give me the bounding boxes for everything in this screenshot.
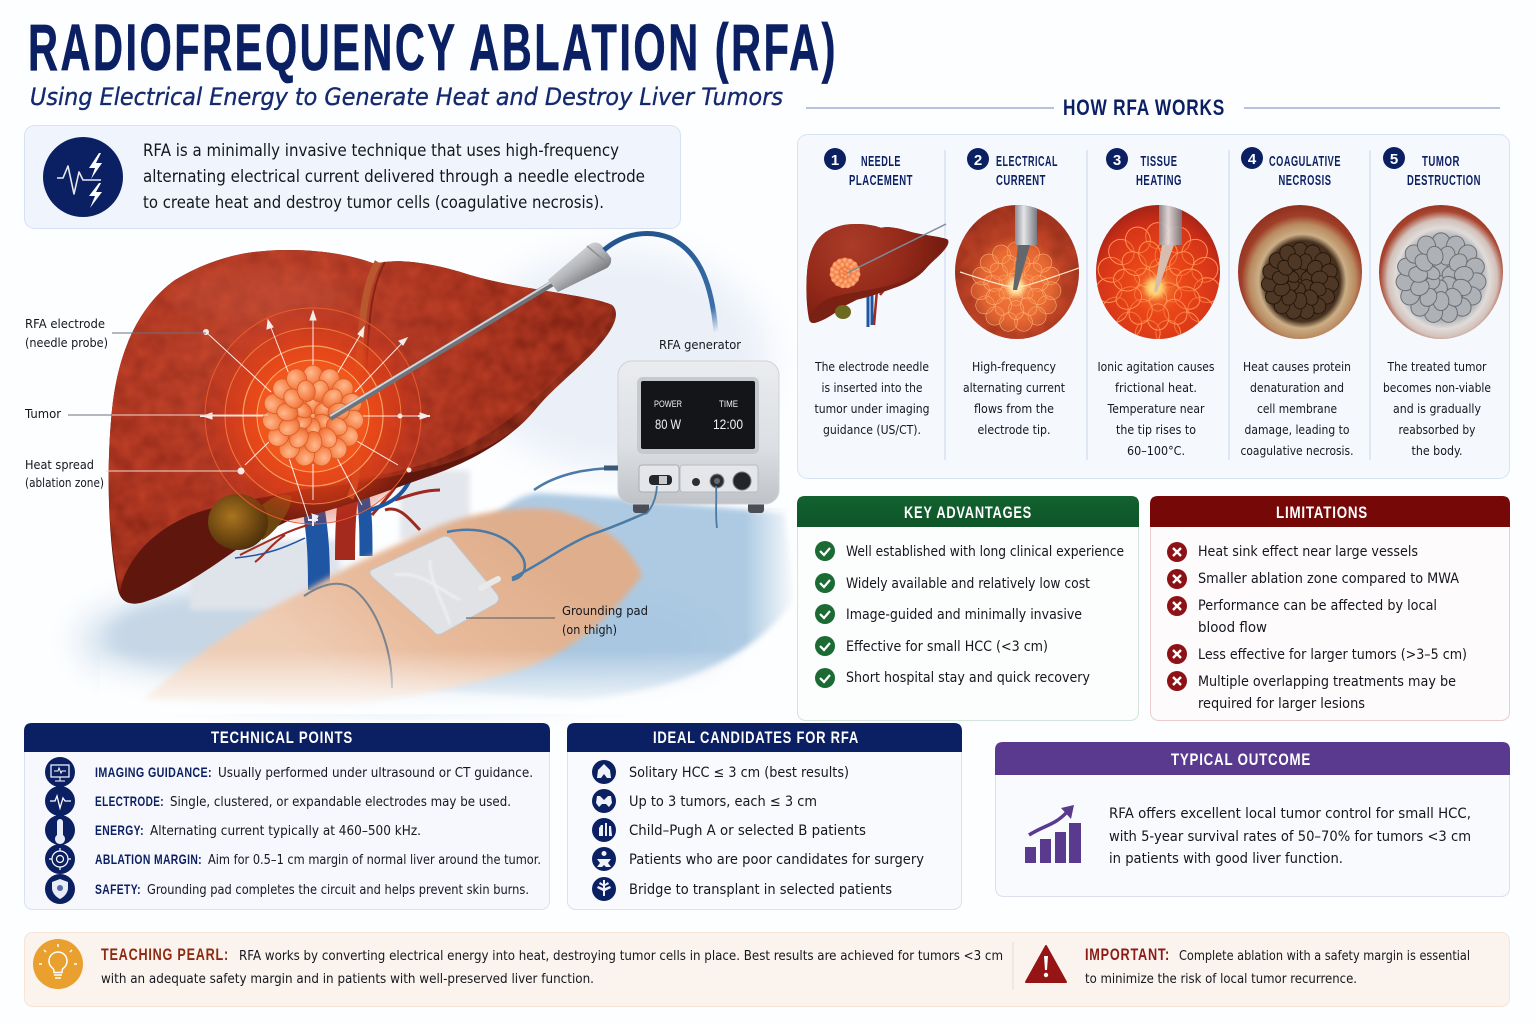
- step 5: tumor destruction: [1379, 147, 1503, 339]
- step 3 description: [1098, 359, 1214, 458]
- ablation zone rings: [200, 308, 430, 526]
- label: RFA electrode: (needle probe): [25, 335, 108, 350]
- panel: limitations: [1150, 496, 1510, 720]
- teaching pearl text: TEACHING PEARL:: [101, 946, 229, 964]
- technical: electrode: [95, 793, 511, 810]
- definition text: to create heat and destroy tumor cells (coagulative necrosis).: [143, 193, 604, 213]
- step 2 description: alternating current: [963, 380, 1065, 395]
- step 4: coagulative necrosis: COAGULATIVE: [1269, 154, 1341, 170]
- step 5 description: becomes non-viable: [1383, 380, 1491, 395]
- step 1 description: is inserted into the: [822, 380, 923, 395]
- generator screen: 12:00: [713, 416, 743, 432]
- tissue image: destruction: [1379, 205, 1503, 339]
- panel: ideal candidates: [567, 723, 962, 910]
- technical: imaging guidance: IMAGING GUIDANCE:: [95, 764, 212, 780]
- backdrop haze: [80, 250, 770, 700]
- bottom and right fade: [100, 510, 810, 715]
- step 4 description: cell membrane: [1257, 401, 1337, 416]
- step 1: needle placement: NEEDLE: [861, 154, 901, 170]
- step 2: electrical current: CURRENT: [996, 173, 1046, 189]
- panel: limitations: LIMITATIONS: [1276, 503, 1368, 522]
- technical: energy: [95, 822, 421, 839]
- technical: imaging guidance: [95, 764, 533, 781]
- step 2 description: electrode tip.: [978, 422, 1050, 437]
- step 1 description: guidance (US/CT).: [823, 422, 921, 437]
- icon: shield: [45, 874, 75, 904]
- step 1 description: tumor under imaging: [814, 401, 930, 416]
- step 3: tissue heating: HEATING: [1136, 173, 1182, 189]
- check icons: [815, 541, 835, 688]
- technical: electrode: Single, clustered, or expandable electrodes may be used.: [170, 795, 511, 810]
- teaching pearl text: [101, 946, 1003, 987]
- gallbladder: [208, 494, 292, 550]
- label: grounding pad: [466, 603, 648, 637]
- heat spread arrows: [200, 311, 430, 526]
- advantages list: Short hospital stay and quick recovery: [846, 670, 1090, 686]
- technical: electrode: ELECTRODE:: [95, 793, 164, 809]
- RFA generator: [604, 361, 779, 513]
- technical: ablation margin: ABLATION MARGIN:: [95, 851, 202, 867]
- RFA needle electrode and handle: [330, 234, 716, 418]
- technical: ablation margin: Aim for 0.5–1 cm margin of normal liver around the tumor.: [208, 853, 541, 868]
- generator screen: 80 W: [655, 416, 682, 432]
- important text: to minimize the risk of local tumor recurrence.: [1085, 972, 1357, 987]
- icon: light bulb: [33, 939, 83, 989]
- icon: rising bars: [1025, 805, 1081, 863]
- step 2 description: [963, 359, 1065, 437]
- advantages list: [846, 544, 1124, 686]
- candidates list: [629, 765, 924, 898]
- icon: monitor: [45, 757, 75, 787]
- main illustration: liver, electrode, generator and grounding pad: [24, 234, 810, 715]
- cross icons: [1167, 542, 1187, 691]
- step 3 description: 60–100°C.: [1127, 443, 1185, 458]
- limitations list: Heat sink effect near large vessels: [1198, 544, 1418, 560]
- step 5: tumor destruction: TUMOR: [1422, 154, 1460, 170]
- step 2: electrical current: 2: [974, 152, 982, 169]
- grounding pad: [370, 536, 499, 634]
- step 5 description: and is gradually: [1393, 401, 1482, 416]
- step 5 description: [1383, 359, 1491, 458]
- step 2: electrical current: [955, 148, 1079, 339]
- limitations list: Multiple overlapping treatments may be: [1198, 674, 1456, 690]
- generator screen: [641, 381, 755, 449]
- step 5 description: reabsorbed by: [1398, 422, 1476, 437]
- mini liver: [806, 224, 948, 327]
- technical: energy: ENERGY:: [95, 822, 144, 838]
- label: heat spread: Heat spread: [25, 457, 94, 472]
- step 4 description: denaturation and: [1250, 380, 1344, 395]
- title: RADIOFREQUENCY ABLATION (RFA): [28, 10, 838, 84]
- step 4 description: coagulative necrosis.: [1240, 443, 1354, 458]
- step 1: needle placement: 1: [831, 152, 839, 169]
- wires around thigh: [304, 468, 646, 688]
- generator controls: [604, 465, 758, 492]
- limitations list: Performance can be affected by local: [1198, 598, 1437, 614]
- icon: waveform: [45, 786, 75, 816]
- limitations list: Smaller ablation zone compared to MWA: [1198, 571, 1459, 587]
- outcome text: in patients with good liver function.: [1109, 851, 1343, 867]
- step 5: tumor destruction: DESTRUCTION: [1407, 173, 1481, 189]
- step 1: needle placement: [806, 148, 948, 327]
- technical: energy: Alternating current typically at 460–500 kHz.: [150, 824, 421, 839]
- step 4: coagulative necrosis: [1238, 147, 1362, 339]
- generator screen: POWER: [654, 399, 682, 410]
- label: heat spread: [25, 457, 240, 490]
- technical: safety: SAFETY:: [95, 881, 141, 897]
- step 3: tissue heating: [1096, 148, 1220, 339]
- definition text: alternating electrical current delivered through a needle electrode: [143, 167, 645, 187]
- label: grounding pad: Grounding pad: [562, 603, 648, 618]
- icon: warning triangle: [1026, 946, 1066, 982]
- step 5 description: the body.: [1412, 443, 1462, 458]
- step 4 description: damage, leading to: [1244, 422, 1350, 437]
- panel: typical outcome: TYPICAL OUTCOME: [1171, 750, 1311, 769]
- candidates list: Solitary HCC ≤ 3 cm (best results): [629, 765, 849, 781]
- panel: technical points: [24, 723, 550, 910]
- advantages list: Image-guided and minimally invasive: [846, 607, 1082, 623]
- step 4 description: Heat causes protein: [1243, 359, 1351, 374]
- section heading: how RFA works: HOW RFA WORKS: [1063, 95, 1225, 120]
- icon: electrical waveform: [43, 137, 123, 217]
- definition text: [143, 141, 645, 213]
- generator output wires: [646, 486, 717, 528]
- panel: teaching pearl and important note: [24, 932, 1510, 1006]
- important text: [1085, 946, 1470, 987]
- cable from handle: [604, 234, 716, 332]
- limitations list: required for larger lesions: [1198, 696, 1365, 712]
- panel: key advantages: KEY ADVANTAGES: [904, 503, 1032, 522]
- label: generator: RFA generator: [659, 337, 742, 352]
- candidates list: Up to 3 tumors, each ≤ 3 cm: [629, 794, 817, 810]
- step 3 description: frictional heat.: [1115, 380, 1197, 395]
- drape: [430, 493, 795, 700]
- step 3 description: the tip rises to: [1116, 422, 1196, 437]
- candidates list: Patients who are poor candidates for surgery: [629, 852, 924, 868]
- outcome text: with 5-year survival rates of 50–70% for tumors <3 cm: [1109, 829, 1471, 845]
- advantages list: Widely available and relatively low cost: [846, 576, 1090, 592]
- advantages list: Effective for small HCC (<3 cm): [846, 639, 1048, 655]
- panel: definition: [24, 126, 680, 228]
- panel: technical points: TECHNICAL POINTS: [211, 729, 353, 747]
- liver: [100, 245, 625, 605]
- icon: target margin: [45, 844, 75, 874]
- step 2: electrical current: ELECTRICAL: [996, 154, 1058, 170]
- icon: thermometer: [45, 815, 75, 845]
- blood vessels: [235, 465, 440, 590]
- tissue image: heating: [1096, 205, 1220, 339]
- panel: key advantages: [797, 496, 1139, 720]
- thigh: [143, 508, 642, 705]
- step 3: tissue heating: TISSUE: [1140, 154, 1178, 170]
- step 2 description: High-frequency: [972, 359, 1057, 374]
- candidates list: Bridge to transplant in selected patients: [629, 882, 892, 898]
- advantages list: Well established with long clinical experience: [846, 544, 1124, 560]
- limitations list: Less effective for larger tumors (>3–5 cm): [1198, 647, 1467, 663]
- panel: ideal candidates: IDEAL CANDIDATES FOR RFA: [653, 729, 859, 747]
- teaching pearl text: RFA works by converting electrical energy into heat, destroying tumor cells in place. Best results are achieved for tumors <3 cm: [239, 949, 1003, 964]
- step 3: tissue heating: 3: [1113, 152, 1121, 169]
- subtitle: Using Electrical Energy to Generate Heat and Destroy Liver Tumors: [30, 83, 783, 111]
- step 1: needle placement: PLACEMENT: [849, 173, 913, 189]
- step 3 description: Ionic agitation causes: [1098, 359, 1214, 374]
- label: RFA electrode: RFA electrode: [25, 316, 105, 331]
- step 3 description: Temperature near: [1107, 401, 1205, 416]
- outcome text: [1109, 806, 1471, 867]
- step 4: coagulative necrosis: 4: [1248, 151, 1257, 168]
- technical: ablation margin: [95, 851, 541, 868]
- step 4 description: [1240, 359, 1354, 458]
- label: grounding pad: (on thigh): [562, 622, 617, 637]
- important text: Complete ablation with a safety margin is essential: [1179, 949, 1470, 964]
- step 1 description: [814, 359, 930, 437]
- label: tumor: Tumor: [24, 406, 62, 421]
- tissue image: current: [955, 205, 1079, 339]
- step 5: tumor destruction: 5: [1390, 151, 1398, 168]
- candidate icons: [592, 760, 616, 901]
- label: RFA electrode: [25, 316, 206, 350]
- limitations list: blood flow: [1198, 620, 1267, 636]
- important text: IMPORTANT:: [1085, 946, 1170, 964]
- step 1 description: The electrode needle: [814, 359, 929, 374]
- technical: imaging guidance: Usually performed under ultrasound or CT guidance.: [218, 766, 533, 781]
- definition text: RFA is a minimally invasive technique that uses high-frequency: [143, 141, 619, 161]
- tissue image: necrosis: [1238, 205, 1362, 339]
- outcome text: RFA offers excellent local tumor control for small HCC,: [1109, 806, 1471, 822]
- limitations list: [1198, 544, 1467, 712]
- technical: safety: Grounding pad completes the circuit and helps prevent skin burns.: [147, 883, 529, 898]
- generator screen: TIME: [719, 399, 738, 410]
- panel: five steps: [798, 134, 1510, 478]
- step 2 description: flows from the: [974, 401, 1054, 416]
- teaching pearl text: with an adequate safety margin and in patients with well-preserved liver function.: [101, 972, 594, 987]
- panel: typical outcome: [995, 742, 1510, 896]
- tumor: [261, 365, 365, 468]
- label: heat spread: (ablation zone): [25, 475, 104, 490]
- step 5 description: The treated tumor: [1387, 359, 1487, 374]
- candidates list: Child–Pugh A or selected B patients: [629, 823, 866, 839]
- step 4: coagulative necrosis: NECROSIS: [1278, 173, 1332, 189]
